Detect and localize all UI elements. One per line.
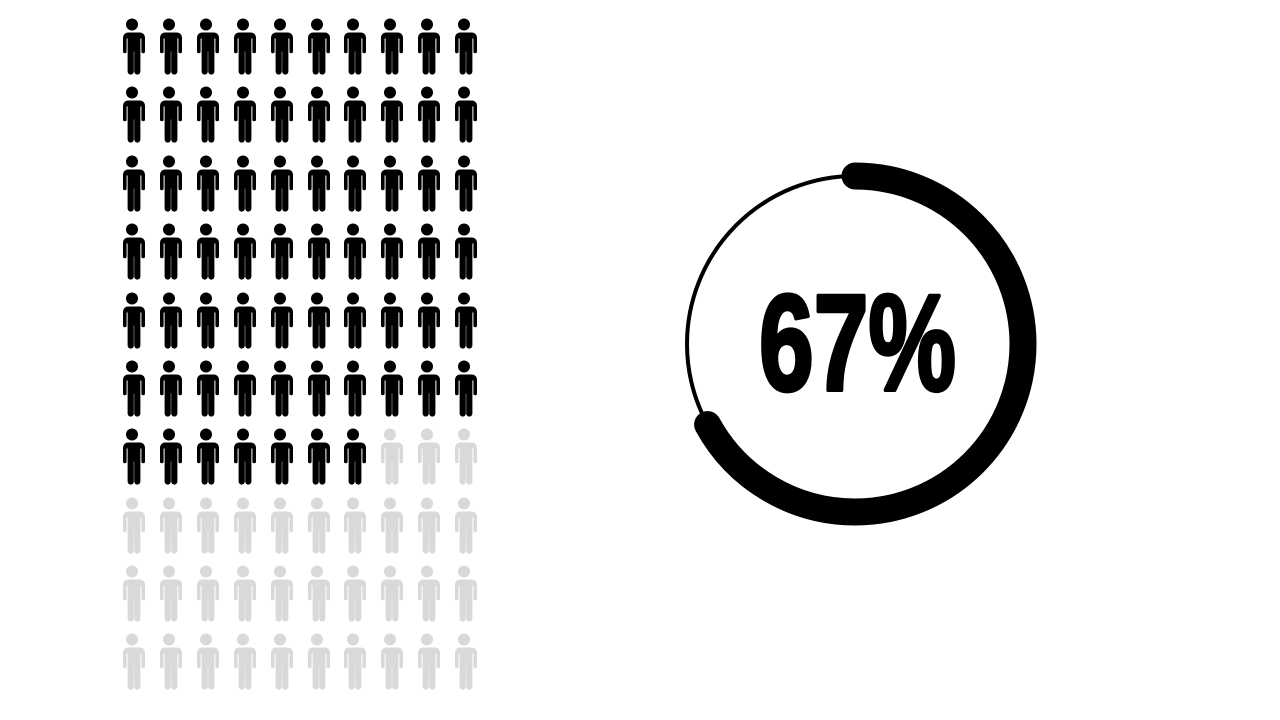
thin track circle [687, 176, 1023, 512]
empty people (33) [123, 428, 477, 690]
filled people (67) [123, 18, 477, 485]
thick progress arc [687, 176, 1023, 512]
progress ring 67% [687, 176, 1023, 512]
people grid: 67 of 100 filled [123, 18, 477, 690]
percentage label: 67% [759, 267, 956, 420]
